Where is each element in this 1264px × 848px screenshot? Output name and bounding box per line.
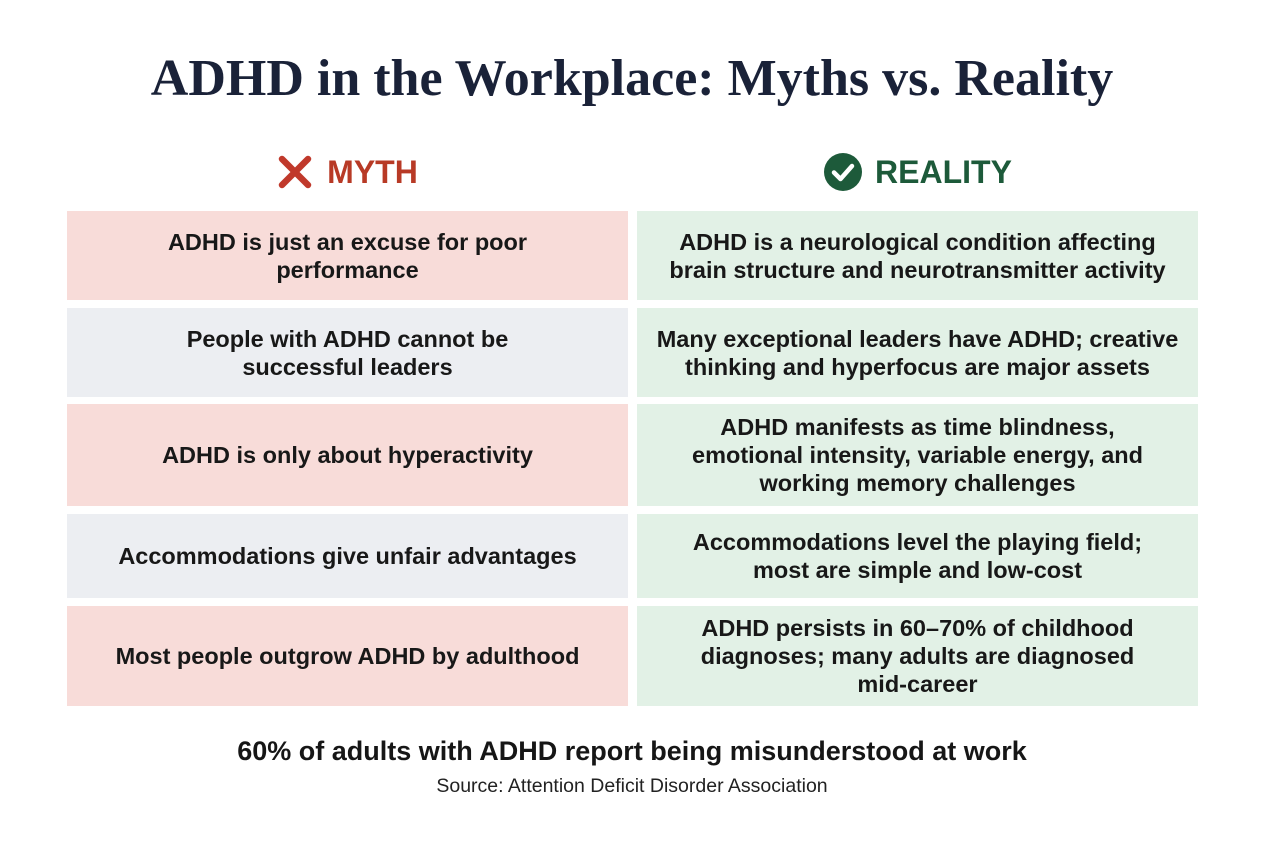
- myth 1: performance: [276, 256, 419, 282]
- header: reality: [824, 153, 1012, 191]
- reality 5: ADHD persists in 60–70% of childhood: [701, 615, 1134, 641]
- reality 2: thinking and hyperfocus are major assets: [685, 354, 1150, 380]
- myth 1: [67, 211, 628, 300]
- reality 3: ADHD manifests as time blindness,: [720, 414, 1115, 440]
- myth 5: [67, 606, 628, 706]
- reality 5: mid-career: [857, 671, 978, 697]
- reality 1: ADHD is a neurological condition affecting: [679, 228, 1156, 254]
- myth 3: ADHD is only about hyperactivity: [162, 442, 533, 468]
- myth 1: ADHD is just an excuse for poor: [168, 228, 527, 254]
- myth 3: [67, 404, 628, 506]
- myth 5: Most people outgrow ADHD by adulthood: [116, 643, 579, 669]
- reality 3: working memory challenges: [759, 470, 1076, 496]
- myth 2: [67, 308, 628, 397]
- header: reality: REALITY: [875, 154, 1012, 190]
- source: Source: Attention Deficit Disorder Association: [436, 775, 828, 797]
- reality 3: [637, 404, 1198, 506]
- reality 2: [637, 308, 1198, 397]
- reality 5: diagnoses; many adults are diagnosed: [701, 643, 1134, 669]
- reality 4: most are simple and low-cost: [753, 557, 1082, 583]
- reality 4: [637, 514, 1198, 598]
- header: myth: MYTH: [327, 154, 418, 190]
- reality 1: [637, 211, 1198, 300]
- myth 2: successful leaders: [242, 354, 453, 380]
- reality 2: Many exceptional leaders have ADHD; creative: [657, 326, 1178, 352]
- footer stat: 60% of adults with ADHD report being misunderstood at work: [237, 736, 1027, 766]
- myth 2: People with ADHD cannot be: [187, 326, 508, 352]
- reality 1: brain structure and neurotransmitter activity: [669, 256, 1166, 282]
- reality 3: emotional intensity, variable energy, and: [692, 442, 1143, 468]
- reality 5: [637, 606, 1198, 706]
- reality 4: Accommodations level the playing field;: [693, 529, 1142, 555]
- title: ADHD in the Workplace: Myths vs. Reality: [151, 50, 1113, 107]
- header: myth: [278, 154, 418, 190]
- myth 4: Accommodations give unfair advantages: [118, 543, 577, 569]
- myth 4: [67, 514, 628, 598]
